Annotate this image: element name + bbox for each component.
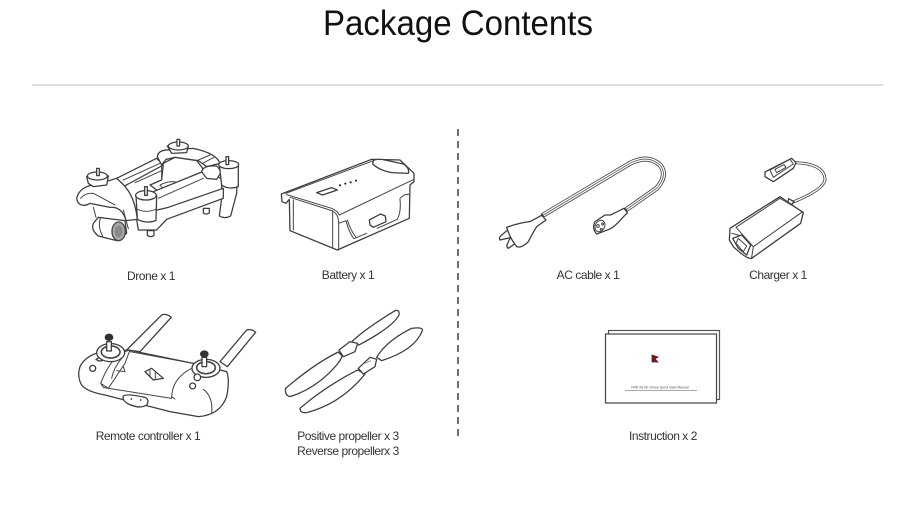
- label: propeller counts: Positive propeller x 3: [297, 429, 400, 443]
- panel: battery: [281, 159, 414, 282]
- label: Remote controller x 1: [96, 429, 201, 443]
- front arm: [77, 178, 137, 221]
- label: Battery x 1: [322, 268, 375, 282]
- left stick: [97, 344, 125, 362]
- icon: propellers: [285, 310, 422, 413]
- label: propeller counts: Reverse propellerx 3: [297, 444, 400, 458]
- connector: [594, 208, 627, 234]
- label: propeller counts: [297, 429, 400, 458]
- icon: drone: [77, 139, 239, 241]
- label: AC cable x 1: [557, 268, 620, 282]
- panel: instruction: [606, 330, 720, 443]
- title: Package Contents: [323, 4, 593, 43]
- panel: remote controller: [79, 314, 256, 443]
- label: Instruction x 2: [629, 429, 698, 443]
- label: Charger x 1: [749, 268, 808, 282]
- icon: instruction manuals: FIMI X8 SE Drone Quick Start Manual: [631, 386, 689, 390]
- panel: charger: [729, 158, 825, 282]
- panel: drone: [77, 139, 239, 283]
- icon: AC cable: [499, 159, 663, 248]
- label: Drone x 1: [127, 269, 176, 283]
- panel: propellers: [285, 310, 422, 458]
- icon: charger: [729, 158, 825, 258]
- panel: AC cable: [499, 159, 663, 282]
- right stick: [192, 359, 220, 377]
- motors: [87, 168, 108, 187]
- camera: [93, 217, 127, 241]
- icon: remote controller: [79, 314, 256, 417]
- icon: battery: [281, 159, 414, 250]
- plug: [499, 229, 512, 240]
